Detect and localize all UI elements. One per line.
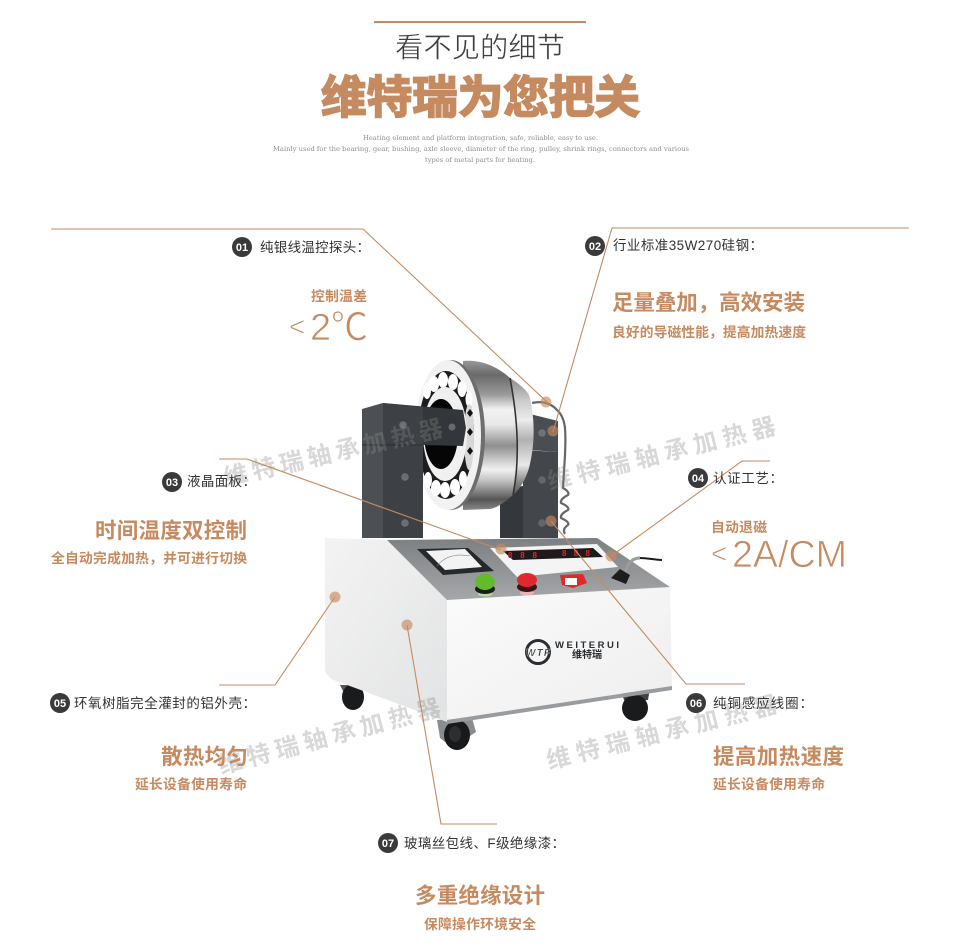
badge 01 bbox=[232, 237, 252, 257]
label 02: 行业标准35W270硅钢： bbox=[613, 238, 763, 253]
right wheel bbox=[620, 688, 650, 721]
machine illustration bbox=[325, 360, 672, 750]
heading 05: 散热均匀 bbox=[161, 745, 248, 769]
display panel: 888 bbox=[508, 551, 538, 560]
badge 02: 02 bbox=[589, 241, 601, 253]
value 01: < bbox=[289, 311, 305, 342]
sub 03: 全自动完成加热，并可进行切换 bbox=[51, 550, 247, 566]
badge 06 bbox=[686, 693, 706, 713]
green button bbox=[475, 574, 495, 596]
callout 02 bbox=[548, 228, 909, 436]
left yoke bbox=[362, 403, 423, 538]
leader line 05 bbox=[219, 592, 340, 685]
badge 05: 05 bbox=[54, 698, 66, 710]
leader line 02 bbox=[548, 228, 909, 436]
badge 01: 01 bbox=[236, 242, 248, 254]
base left panel bbox=[325, 538, 447, 722]
leader line 01 bbox=[51, 229, 552, 408]
right yoke bbox=[500, 414, 558, 538]
display panel: 888 bbox=[562, 549, 591, 558]
badge 02 bbox=[585, 236, 605, 256]
sub 02: 良好的导磁性能，提高加热速度 bbox=[612, 324, 806, 340]
badge 07: 07 bbox=[382, 838, 394, 850]
red button bbox=[517, 573, 537, 596]
leader line 03 bbox=[219, 459, 506, 554]
badge 06: 06 bbox=[690, 698, 702, 710]
badge 05 bbox=[50, 693, 70, 713]
callout 04 bbox=[606, 461, 847, 576]
watermarks: 维特瑞轴承加热器 bbox=[545, 413, 779, 496]
yoke bar bbox=[383, 403, 466, 446]
value 01: 2 bbox=[310, 307, 331, 349]
english description: Heating element and platform integration, safe, reliable, easy to use. bbox=[363, 134, 598, 142]
watermarks: 维特瑞轴承加热器 bbox=[216, 694, 444, 780]
value 01 bbox=[289, 307, 368, 349]
callout 03 bbox=[51, 459, 506, 566]
back left wheel bbox=[340, 684, 364, 710]
sub 05: 延长设备使用寿命 bbox=[135, 776, 247, 792]
plug and cable bbox=[611, 558, 662, 584]
value 04: < bbox=[711, 538, 727, 569]
label 07: 玻璃丝包线、F级绝缘漆： bbox=[404, 835, 565, 851]
leader line 04 bbox=[606, 461, 770, 562]
watermarks: 维特瑞轴承加热器 bbox=[544, 691, 780, 775]
label 01: 纯银线温控探头： bbox=[260, 240, 370, 255]
badge 04: 04 bbox=[692, 473, 705, 485]
label 03: 液晶面板： bbox=[187, 474, 256, 489]
callout 01 bbox=[51, 229, 552, 408]
badge 03 bbox=[162, 472, 182, 492]
watermarks bbox=[216, 413, 780, 780]
bearing bbox=[415, 360, 534, 510]
heading 02: 足量叠加，高效安装 bbox=[612, 290, 805, 315]
label 05: 环氧树脂完全灌封的铝外壳： bbox=[74, 695, 256, 711]
sub 06: 延长设备使用寿命 bbox=[713, 776, 825, 792]
heading 06: 提高加热速度 bbox=[713, 744, 844, 769]
logo: 维特瑞 bbox=[572, 648, 602, 661]
label 04: 认证工艺： bbox=[713, 471, 783, 486]
front wheel bbox=[437, 718, 476, 750]
callout 07 bbox=[378, 620, 565, 932]
header: top rule and titles bbox=[273, 21, 689, 164]
red switch bbox=[560, 574, 587, 588]
leader line 07 bbox=[402, 620, 497, 824]
main title: 维特瑞为您把关 bbox=[321, 72, 640, 123]
subtitle: 看不见的细节 bbox=[395, 32, 565, 63]
wheels bbox=[340, 684, 650, 750]
english description bbox=[273, 134, 689, 164]
badge 04 bbox=[688, 468, 708, 488]
analog meter bbox=[417, 548, 494, 575]
logo: WTF bbox=[526, 648, 551, 659]
badge 03: 03 bbox=[166, 477, 178, 489]
watermarks: 维特瑞轴承加热器 bbox=[221, 415, 446, 492]
english description: types of metal parts for heating. bbox=[425, 156, 535, 164]
callout 05 bbox=[50, 592, 340, 792]
note 04: 自动退磁 bbox=[711, 519, 767, 535]
heading 03: 时间温度双控制 bbox=[95, 519, 247, 543]
base top panel bbox=[387, 538, 670, 600]
probe wire bbox=[532, 402, 568, 534]
display panel bbox=[490, 544, 618, 577]
base front panel bbox=[447, 587, 672, 720]
badge 07 bbox=[378, 833, 398, 853]
heading 07: 多重绝缘设计 bbox=[415, 883, 545, 908]
value 01: ℃ bbox=[331, 307, 368, 349]
note 01: 控制温差 bbox=[311, 288, 367, 304]
value 04: 2A/CM bbox=[732, 534, 847, 576]
callout 06 bbox=[546, 516, 844, 792]
sub 07: 保障操作环境安全 bbox=[424, 916, 536, 932]
english description: Mainly used for the bearing, gear, bushing, axle sleeve, diameter of the ring, pulley, shrink rings, connectors and various bbox=[273, 145, 689, 153]
logo: WEITERUI bbox=[555, 640, 619, 651]
label 06: 纯铜感应线圈： bbox=[713, 695, 813, 711]
leader line 06 bbox=[546, 516, 745, 684]
logo bbox=[526, 640, 619, 664]
